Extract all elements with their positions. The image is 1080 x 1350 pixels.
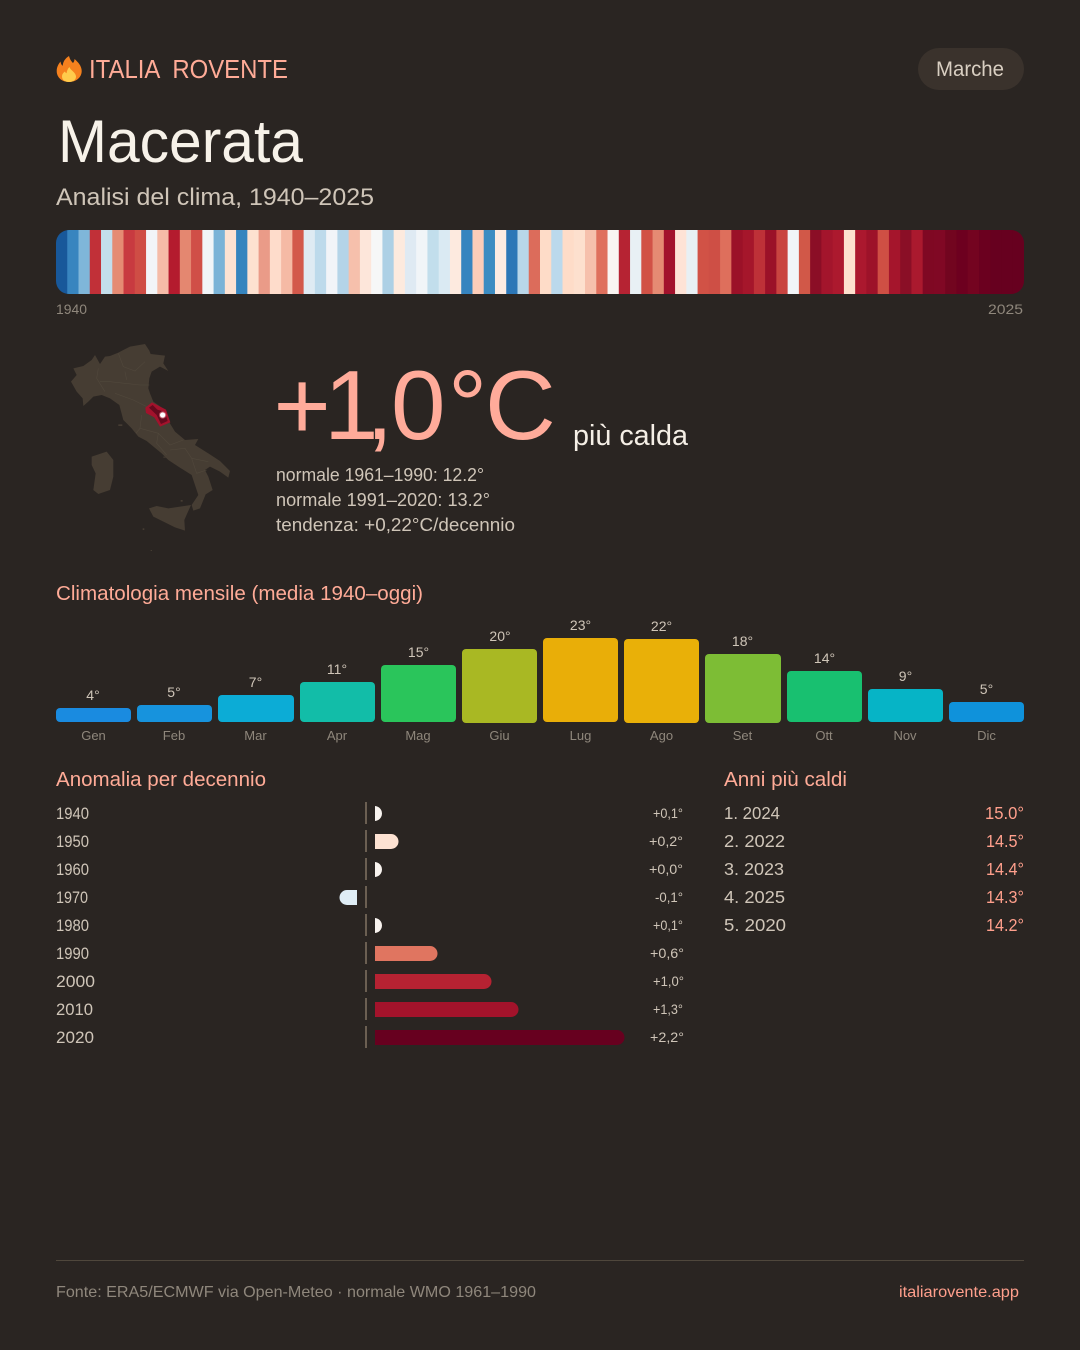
heading: hottest years: Anni più caldi [724,769,847,791]
climate stats: normale 1991–2020: 13.2° [276,489,490,510]
decade anomaly chart: 1990 [56,945,89,963]
heading: decade anomaly: Anomalia per decennio [56,769,266,791]
decade anomaly chart: +0,0° [649,861,683,877]
monthly bar chart: 4° [86,687,100,703]
monthly bar chart: Ago [650,728,673,743]
hottest years list: 2. 2022 [724,831,785,851]
headline anomaly: +1,0°C [274,350,556,460]
monthly bar chart: Apr [327,728,348,743]
monthly bar chart: 11° [327,661,347,677]
icon: flame [57,56,82,82]
hottest years list: 14.5° [986,831,1024,851]
decade anomaly chart [56,802,684,1048]
monthly bar chart: 22° [651,618,672,634]
region badge: Marche: Marche [936,58,1004,81]
monthly bar chart: Ott [815,728,833,743]
decade anomaly chart: +0,1° [653,917,683,933]
headline caption: più calda [573,420,689,452]
monthly bar chart: 5° [167,684,181,700]
decade anomaly chart: +2,2° [650,1029,684,1045]
monthly bar chart: Lug [570,728,591,743]
climate stripes 1940-2025 [56,230,1024,294]
Sicily [149,505,191,531]
decade anomaly chart: +0,6° [650,945,684,961]
city marker [159,411,166,419]
hottest years list: 14.4° [986,859,1024,879]
Marche region [145,402,170,427]
decade anomaly chart: +0,1° [653,805,683,821]
decade anomaly chart: -0,1° [655,889,683,905]
hottest years list: 5. 2020 [724,915,786,935]
climate stats: normale 1961–1990: 12.2° [276,464,484,485]
climate stats [276,464,515,535]
subtitle: Analisi del clima, 1940–2025 [56,184,374,211]
mainland [71,344,230,511]
regional borders [97,353,208,473]
stripes start year: 1940 [56,301,87,317]
monthly bar chart: 15° [408,644,429,660]
decade anomaly chart: 2020 [56,1029,94,1047]
decade anomaly chart: 2010 [56,1001,93,1019]
monthly bar chart: Nov [893,728,917,743]
hottest years list: 4. 2025 [724,887,785,907]
monthly bar chart: Gen [81,728,106,743]
hottest years list: 1. 2024 [724,803,780,823]
decade anomaly chart: +0,2° [649,833,683,849]
hottest years list [724,803,1024,935]
monthly bar chart: 5° [980,681,993,697]
decade anomaly chart: +1,0° [653,973,684,989]
monthly bar chart: Dic [977,728,996,743]
monthly bar chart: Mag [405,728,431,743]
decade anomaly chart: 1940 [56,805,89,823]
small islands [118,424,183,551]
footer link: italiarovente.app [899,1284,1019,1301]
decade anomaly chart: 1980 [56,917,89,935]
monthly bar chart: 20° [489,628,511,644]
hottest years list: 14.3° [986,887,1024,907]
Macerata province [149,405,168,424]
monthly bar chart: 18° [732,633,753,649]
map of Italy with Marche highlighted [71,344,230,551]
decade anomaly chart: 1950 [56,833,89,851]
footer source: Fonte: ERA5/ECMWF via Open-Meteo · normale WMO 1961–1990 [56,1284,536,1301]
monthly bar chart: 9° [899,668,912,684]
decade anomaly chart: 1960 [56,861,89,879]
decade anomaly chart: 2000 [56,973,95,991]
logo: Italia Rovente: ITALIA ROVENTE [89,54,288,84]
hottest years list: 15.0° [985,803,1024,823]
heading: monthly climatology: Climatologia mensile (media 1940–oggi) [56,583,423,605]
Sardinia [92,452,113,494]
monthly bar chart: Giu [489,728,510,743]
monthly bar chart [56,617,1024,743]
monthly bar chart: Mar [244,728,267,743]
monthly bar chart: 14° [814,650,835,666]
hottest years list: 3. 2023 [724,859,784,879]
monthly bar chart: 7° [249,674,262,690]
decade anomaly chart: +1,3° [653,1001,683,1017]
region badge: Marche [918,48,1024,90]
decade anomaly chart: 1970 [56,889,88,907]
monthly bar chart: Set [733,728,753,743]
hottest years list: 14.2° [986,915,1024,935]
climate stats: tendenza: +0,22°C/decennio [276,514,515,535]
monthly bar chart: Feb [163,728,185,743]
title: Macerata [58,108,304,175]
stripes end year: 2025 [988,301,1023,317]
monthly bar chart: 23° [570,617,591,633]
